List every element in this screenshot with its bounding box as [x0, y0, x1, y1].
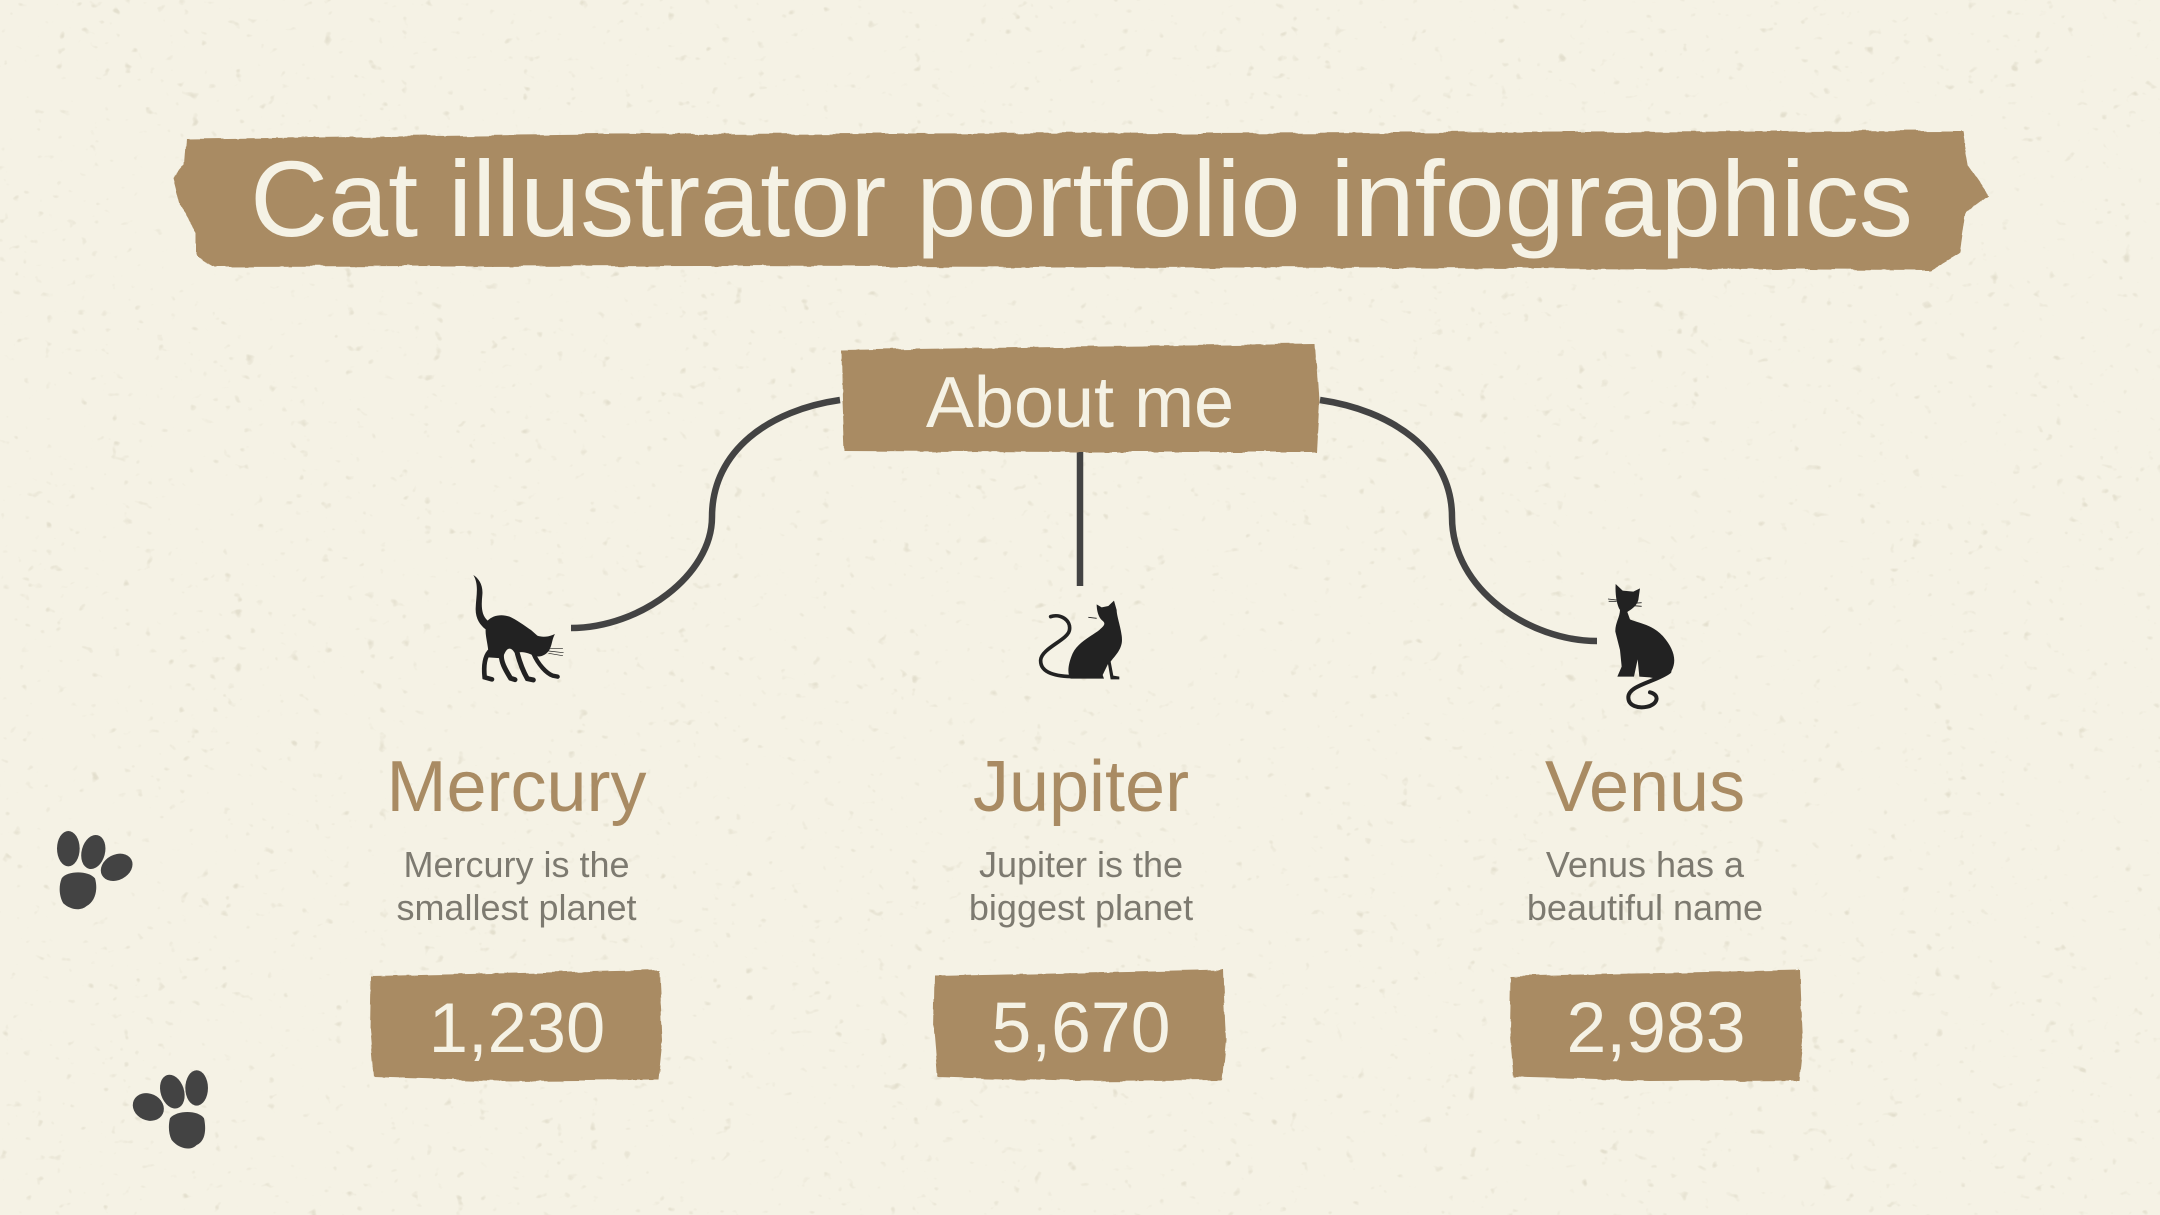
- value box: Jupiter: [934, 970, 1226, 1081]
- column: Venus: [1510, 747, 1803, 1081]
- about me box: [841, 344, 1319, 452]
- description: Jupiter: biggest planet: [969, 887, 1193, 928]
- value box: Mercury: 1,230: [429, 988, 605, 1067]
- value box: Jupiter: 5,670: [992, 988, 1170, 1068]
- icon: sitting cat looking back: [1041, 601, 1122, 679]
- heading: Venus: Venus: [1545, 747, 1745, 827]
- icon: sitting cat facing forward: [1608, 584, 1674, 707]
- title: [173, 131, 1989, 270]
- connector: right curve: [1320, 400, 1597, 641]
- description: Jupiter: Jupiter is the: [979, 844, 1183, 885]
- icon: arched cat: [473, 575, 563, 680]
- heading: Mercury: Mercury: [386, 747, 647, 827]
- value box: Mercury: [370, 970, 662, 1081]
- title band: [173, 131, 1989, 270]
- description: Venus: beautiful name: [1527, 887, 1763, 928]
- description: Venus: Venus has a: [1546, 844, 1745, 885]
- value box: Venus: [1510, 970, 1803, 1081]
- description: Mercury: smallest planet: [396, 887, 637, 928]
- connector: left curve: [571, 400, 840, 628]
- about me text: About me: [926, 363, 1234, 443]
- icon: paw print upper: [57, 831, 137, 909]
- connector: center line: [1077, 452, 1083, 586]
- description: Mercury: Mercury is the: [403, 844, 630, 885]
- icon: paw print lower: [128, 1070, 208, 1149]
- column: Jupiter: [934, 747, 1226, 1081]
- value box: Venus: 2,983: [1567, 988, 1745, 1068]
- title text: Cat illustrator portfolio infographics: [250, 138, 1913, 259]
- about me band: [841, 344, 1319, 452]
- column: Mercury: [370, 747, 662, 1081]
- heading: Jupiter: Jupiter: [973, 747, 1189, 827]
